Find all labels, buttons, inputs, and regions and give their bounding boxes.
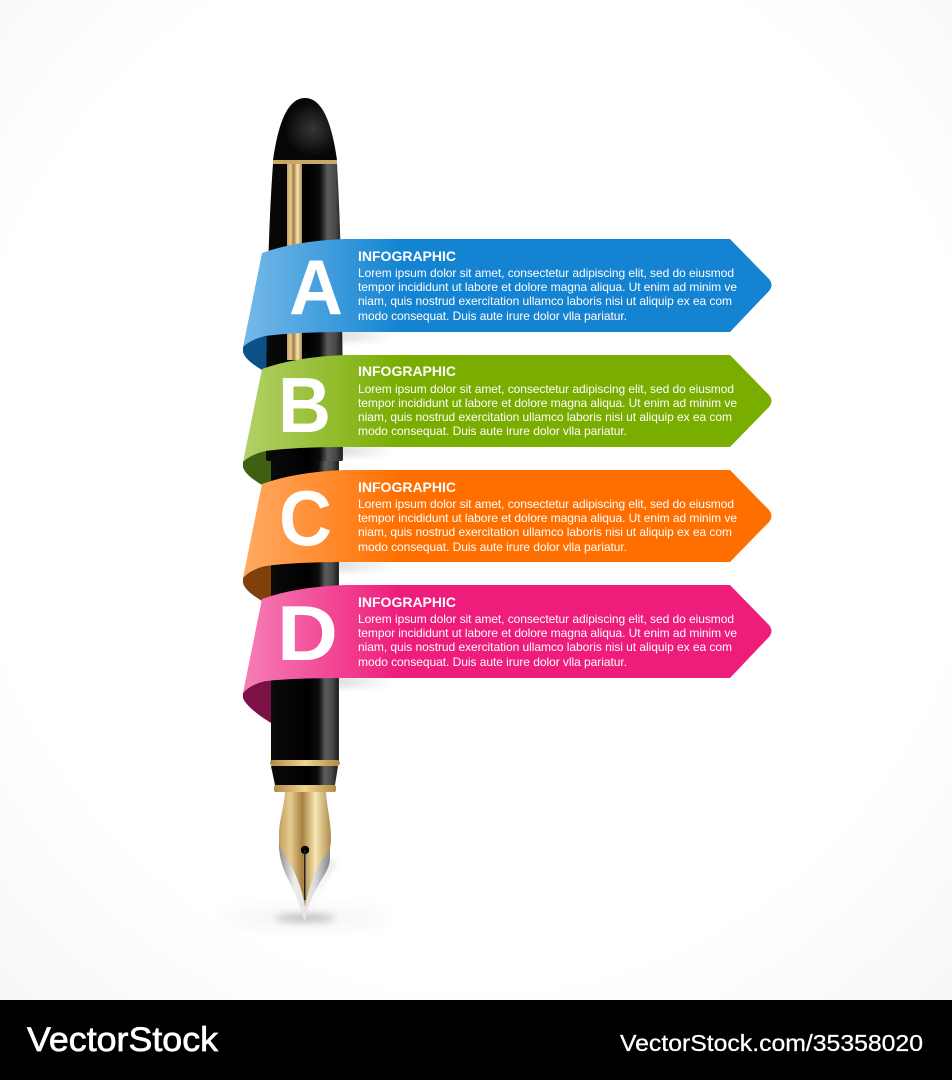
letter D: D [277,589,338,677]
gold cap ring [273,160,337,164]
body text: modo consequat. Duis aute irure dolor vlla pariatur. [358,540,627,554]
body text: Lorem ipsum dolor sit amet, consectetur adipiscing elit, sed do eiusmod [358,497,734,511]
body text: niam, quis nostrud exercitation ullamco laboris nisi ut aliquip ex ea com [358,410,732,424]
fountain pen [266,98,343,922]
gold ring [270,760,340,766]
letter B: B [278,361,331,449]
body text: tempor incididunt ut labore et dolore magna aliqua. Ut enim ad minim ve [358,626,737,640]
pen grip section [271,766,338,785]
gold base band [274,785,336,792]
footer image id: VectorStock.com/35358020 [620,1030,923,1056]
footer bar [0,1000,952,1080]
body text [358,382,737,438]
body text: niam, quis nostrud exercitation ullamco laboris nisi ut aliquip ex ea com [358,294,732,308]
footer logo: VectorStock [27,1021,219,1059]
body text [358,612,737,669]
pen nib [279,792,336,922]
body text: tempor incididunt ut labore et dolore magna aliqua. Ut enim ad minim ve [358,511,737,525]
ribbon shape [243,585,772,693]
body text: Lorem ipsum dolor sit amet, consectetur adipiscing elit, sed do eiusmod [358,612,734,626]
letter C: C [279,474,332,562]
ribbon fold: C [243,562,300,601]
letter A: A [289,243,343,331]
heading: INFOGRAPHIC [358,248,456,264]
ribbon D [243,585,772,693]
body text: tempor incididunt ut labore et dolore magna aliqua. Ut enim ad minim ve [358,280,737,294]
nib ground shadow [220,913,390,923]
body text: tempor incididunt ut labore et dolore magna aliqua. Ut enim ad minim ve [358,396,737,410]
ribbon fold: B [243,447,300,485]
body text: modo consequat. Duis aute irure dolor vlla pariatur. [358,309,627,323]
ribbon shape [243,239,772,347]
pen barrel [271,460,339,761]
ribbon C [243,470,772,578]
body text [358,266,737,323]
body text: modo consequat. Duis aute irure dolor vlla pariatur. [358,655,627,669]
ribbon shape [243,355,772,462]
gold clip [287,164,302,360]
heading: INFOGRAPHIC [358,363,456,379]
body text: niam, quis nostrud exercitation ullamco laboris nisi ut aliquip ex ea com [358,640,732,654]
pen cap [266,164,343,450]
body text: niam, quis nostrud exercitation ullamco laboris nisi ut aliquip ex ea com [358,525,732,539]
ribbon B [243,355,772,462]
ribbon fold: A [243,332,300,370]
body text: modo consequat. Duis aute irure dolor vlla pariatur. [358,424,627,438]
cap flange [266,449,343,461]
heading: INFOGRAPHIC [358,594,456,610]
body text: Lorem ipsum dolor sit amet, consectetur adipiscing elit, sed do eiusmod [358,382,734,396]
ribbon shape [243,470,772,578]
cap dome [273,98,337,160]
ribbon fold: D [243,678,300,723]
ribbon A [243,239,772,347]
body text: Lorem ipsum dolor sit amet, consectetur adipiscing elit, sed do eiusmod [358,266,734,280]
body text [358,497,737,554]
heading: INFOGRAPHIC [358,479,456,495]
ribbon shadows on background [336,328,395,688]
